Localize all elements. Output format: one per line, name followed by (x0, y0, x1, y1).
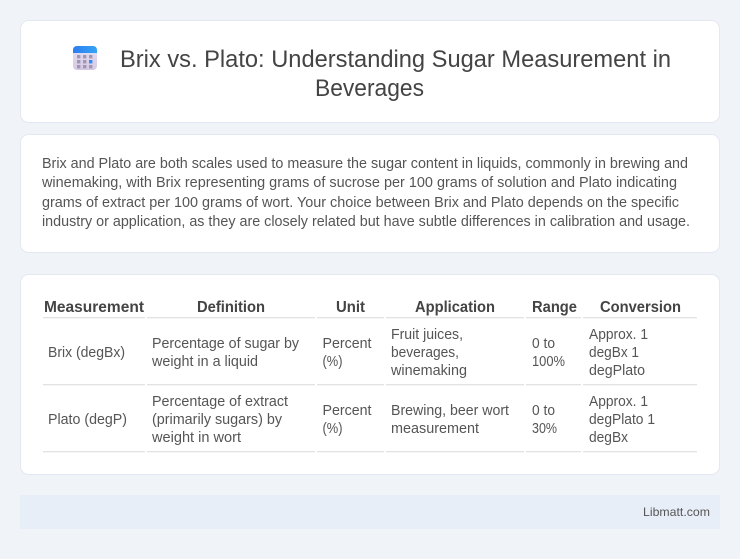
table row: Brix: Percentage of sugar by (152, 336, 300, 352)
title: Beverages (315, 75, 424, 102)
table row: Plato: Plato (degP) (48, 412, 127, 428)
table row: Plato: Percentage of extract (152, 394, 288, 410)
table row: Brix: winemaking (390, 363, 467, 379)
title: Brix vs. Plato: Understanding Sugar Measurement in (120, 46, 671, 73)
footer text: Libmatt.com (643, 505, 710, 519)
table row: Brix: degBx 1 (589, 345, 639, 361)
table header row: Application (415, 299, 495, 316)
table row: Plato: 30% (532, 421, 557, 437)
table header row: Conversion (600, 299, 681, 316)
table row: Plato: (%) (322, 421, 342, 437)
table row: Brix: 0 to (532, 336, 555, 352)
table row: Brix: weight in a liquid (151, 354, 258, 370)
table row: Plato: Percent (322, 403, 372, 419)
table row: Plato: Brewing, beer wort (391, 403, 509, 419)
table row: Plato: 0 to (532, 403, 555, 419)
text block: intro: winemaking, with Brix representing grams of sucrose per 100 grams of solution and Plato indicating (41, 175, 677, 191)
table row: Brix: Percent (322, 336, 372, 352)
icon: calendar (73, 46, 97, 70)
table row: Brix: 100% (532, 354, 565, 370)
table header row (44, 299, 681, 316)
title (120, 46, 671, 102)
panel: comparison table (20, 274, 720, 474)
text block: intro: grams of extract per 100 grams of wort. Your choice between Brix and Plato depends on the specific (42, 195, 679, 211)
table row: Plato: weight in wort (151, 430, 241, 446)
table header row: Definition (197, 299, 265, 316)
table header row: Unit (336, 299, 366, 316)
panel: title card (20, 20, 720, 122)
table row: Plato: measurement (391, 421, 479, 437)
table row: Brix (48, 327, 648, 379)
text block: intro: industry or application, as they are closely related but have subtle differences in calibration and usage. (42, 214, 690, 230)
footer bar (20, 495, 720, 529)
table row: Plato: degPlato 1 (589, 412, 655, 428)
table row: Brix: degPlato (589, 363, 645, 379)
table row: Plato: (primarily sugars) by (152, 412, 283, 428)
table row: Plato: degBx (589, 430, 629, 446)
table row: Plato (48, 394, 655, 446)
table row: Brix: Brix (degBx) (48, 345, 125, 361)
panel: intro paragraph (20, 134, 720, 252)
text block: intro (41, 156, 690, 230)
table header row: Range (532, 299, 577, 316)
table row: Brix: Fruit juices, (391, 327, 463, 343)
table row: Brix: Approx. 1 (589, 327, 648, 343)
table header row: Measurement (44, 299, 145, 316)
table row: Brix: (%) (322, 354, 342, 370)
text block: intro: Brix and Plato are both scales used to measure the sugar content in liquids, commonly in brewing and (42, 156, 688, 172)
table row: Plato: Approx. 1 (589, 394, 648, 410)
table row: Brix: beverages, (391, 345, 459, 361)
